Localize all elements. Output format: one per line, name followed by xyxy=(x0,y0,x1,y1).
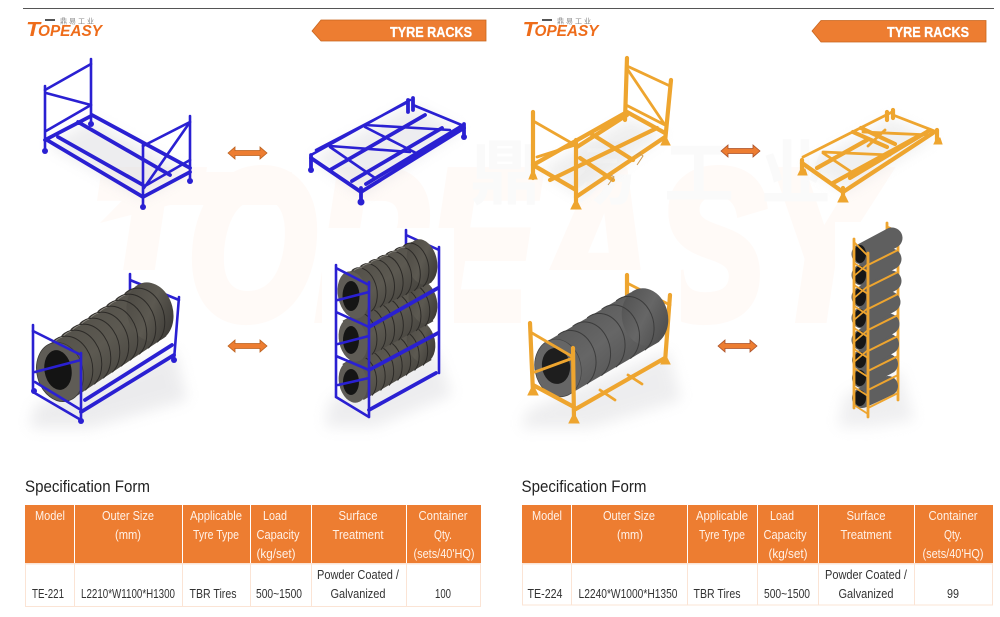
table: specification left: Capacity xyxy=(256,527,300,542)
table: specification right: 500~1500 xyxy=(764,586,810,601)
top rule xyxy=(23,8,994,9)
table: specification left: 500~1500 xyxy=(256,586,302,601)
arrow: bottom right double xyxy=(718,340,757,352)
table: specification left: Qty. xyxy=(434,527,452,542)
table: specification left: TBR Tires xyxy=(190,586,237,601)
tyres tier three xyxy=(335,319,439,405)
rack: blue with tyres xyxy=(27,270,187,428)
table: specification right: (sets/40'HQ) xyxy=(922,546,984,561)
table: specification right: Galvanized xyxy=(838,586,894,601)
banner: tyre racks right: TYRE RACKS xyxy=(887,24,969,41)
table: specification left: Galvanized xyxy=(330,586,386,601)
rack: blue folded xyxy=(308,98,467,206)
table: specification right: TE-224 xyxy=(528,586,562,601)
table: specification left: (sets/40'HQ) xyxy=(414,546,474,561)
heading: specification form right: Specification Form xyxy=(522,477,646,496)
table: specification right: Tyre Type xyxy=(699,527,745,542)
logo: Topeasy right xyxy=(522,16,600,41)
rack: yellow folded xyxy=(798,110,942,202)
table: specification left: Load xyxy=(263,508,287,523)
tyres tier two xyxy=(335,278,441,364)
banner: tyre racks left: TYRE RACKS xyxy=(390,24,472,41)
table: specification right xyxy=(522,505,993,605)
logo: Topeasy left xyxy=(26,16,103,41)
table: specification left: Treatment xyxy=(332,527,384,542)
table: specification right: Model xyxy=(532,508,562,523)
rack: yellow tower eight tiers xyxy=(835,222,915,427)
table: specification left: Surface xyxy=(338,508,378,523)
table: specification left: (kg/set) xyxy=(256,546,296,561)
table: specification left: 100 xyxy=(435,586,451,601)
logo: Topeasy left: 鼎易工业 xyxy=(60,16,96,26)
logo: Topeasy left: OPEASY xyxy=(38,23,103,40)
table: specification left: Outer Size xyxy=(102,508,154,523)
table: specification right: Powder Coated / xyxy=(825,567,907,582)
table: specification right: Applicable xyxy=(696,508,748,523)
table: specification left: Powder Coated / xyxy=(317,567,399,582)
table: specification left xyxy=(25,505,481,606)
table: specification left: Tyre Type xyxy=(193,527,239,542)
tyres tier one xyxy=(333,236,441,322)
tyres tiers xyxy=(862,238,892,398)
table: specification right: Treatment xyxy=(840,527,892,542)
table: specification left: Container xyxy=(418,508,468,523)
rack: yellow with tyres xyxy=(521,270,681,428)
table: specification right: Surface xyxy=(846,508,886,523)
table: specification left: (mm) xyxy=(115,527,141,542)
logo: Topeasy left: T xyxy=(26,19,42,41)
table: specification right: Qty. xyxy=(944,527,962,542)
table: specification right: TBR Tires xyxy=(694,586,741,601)
banner: tyre racks right xyxy=(812,20,986,42)
table: specification right: Outer Size xyxy=(603,508,655,523)
table: specification right: Capacity xyxy=(764,527,807,542)
arrow: top right double xyxy=(721,145,760,157)
table: specification right: (mm) xyxy=(617,527,643,542)
watermark: Chinese company name: 鼎易工业 xyxy=(470,135,858,213)
tyres cylinder xyxy=(529,284,674,401)
logo: Topeasy right: T xyxy=(522,19,539,41)
rack: yellow open empty xyxy=(529,58,671,209)
logo: Topeasy right: 鼎易工业 xyxy=(557,16,593,26)
panel: left product xyxy=(25,16,486,606)
table: specification left: Model xyxy=(35,508,65,523)
rack: blue stacked three tiers xyxy=(322,228,454,428)
panel: right product xyxy=(521,16,993,605)
rack: blue open empty xyxy=(42,59,193,210)
arrow: bottom left double xyxy=(228,340,267,352)
table: specification right: Container xyxy=(928,508,978,523)
table: specification left: L2210*W1100*H1300 xyxy=(81,586,175,601)
tyres cylinder xyxy=(30,277,180,407)
table: specification right: (kg/set) xyxy=(768,546,808,561)
table: specification right: L2240*W1000*H1350 xyxy=(578,586,678,601)
table: specification right: Load xyxy=(770,508,794,523)
table: specification left: TE-221 xyxy=(32,586,64,601)
banner: tyre racks left xyxy=(312,20,486,41)
table: specification left: Applicable xyxy=(190,508,242,523)
table: specification right: 99 xyxy=(947,586,959,601)
heading: specification form left: Specification Form xyxy=(25,477,150,496)
arrow: top left double xyxy=(228,147,267,159)
logo: Topeasy right: OPEASY xyxy=(534,23,600,40)
